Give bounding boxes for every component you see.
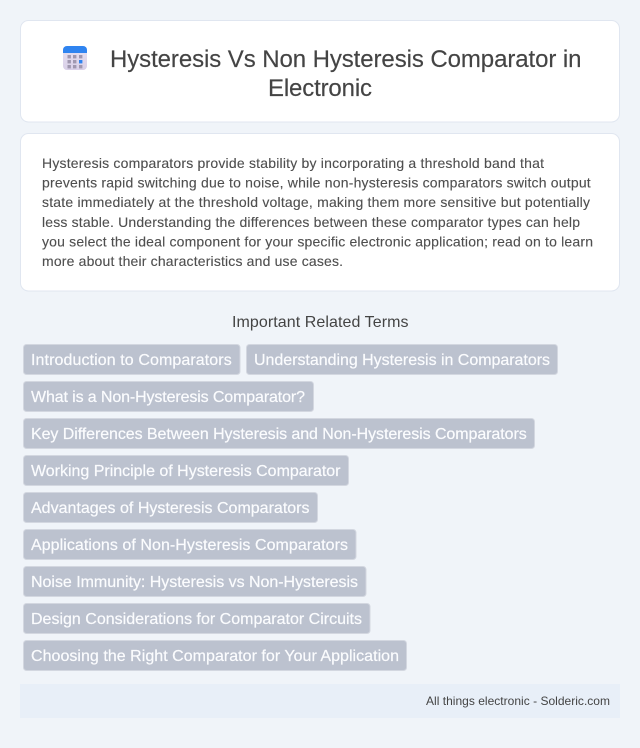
panel: title card [20, 20, 620, 122]
tag: choosing the right comparator [24, 640, 406, 670]
panel: introduction [20, 134, 620, 291]
tag: applications [24, 530, 356, 560]
footer: All things electronic - Solderic.com [426, 694, 610, 708]
tag: working principle: Working Principle of Hysteresis Comparator [31, 463, 341, 480]
tag: non-hysteresis comparator: What is a Non-Hysteresis Comparator? [31, 389, 305, 406]
icon: calendar [63, 46, 87, 70]
tag: key differences: Key Differences Between Hysteresis and Non-Hysteresis Comparators [31, 426, 527, 443]
tag: noise immunity: Noise Immunity: Hysteresis vs Non-Hysteresis [31, 574, 358, 591]
text block: introduction paragraph: prevents rapid switching due to noise, while non-hysteresis comparators switch output [42, 175, 591, 191]
tag: introduction to comparators [24, 344, 240, 374]
tag: advantages: Advantages of Hysteresis Comparators [31, 500, 310, 517]
title: Hysteresis Vs Non Hysteresis Comparator in [110, 46, 582, 73]
panel: related terms tags [24, 344, 558, 670]
tag: working principle [24, 456, 348, 486]
tag: design considerations [24, 604, 370, 634]
footer [20, 684, 620, 718]
tag: choosing the right comparator: Choosing the Right Comparator for Your Application [31, 648, 399, 665]
text block: introduction paragraph: Hysteresis comparators provide stability by incorporating a threshold band that [42, 155, 544, 171]
text block: introduction paragraph [42, 155, 593, 269]
text block: introduction paragraph: more about their characteristics and use cases. [42, 253, 343, 269]
text block: introduction paragraph: less stable. Understanding the differences between these comparator types can help [42, 214, 580, 230]
tag: design considerations: Design Considerations for Comparator Circuits [31, 611, 362, 628]
tag: key differences [24, 418, 534, 448]
text block: introduction paragraph: state immediately at the threshold voltage, making them more sensitive but potentially [42, 194, 590, 210]
tag: non-hysteresis comparator [24, 382, 314, 412]
heading: important related terms: Important Related Terms [232, 314, 408, 331]
tag: noise immunity [24, 566, 366, 596]
tag: applications: Applications of Non-Hysteresis Comparators [31, 537, 348, 554]
title: Electronic [268, 75, 372, 102]
text block: introduction paragraph: you select the ideal component for your specific electronic application; read on to learn [42, 233, 593, 249]
tag: advantages [24, 492, 318, 522]
tag: introduction to comparators: Introduction to Comparators [31, 352, 232, 369]
tag: understanding hysteresis: Understanding Hysteresis in Comparators [254, 352, 550, 369]
title [110, 46, 582, 102]
tag: understanding hysteresis [246, 344, 558, 374]
